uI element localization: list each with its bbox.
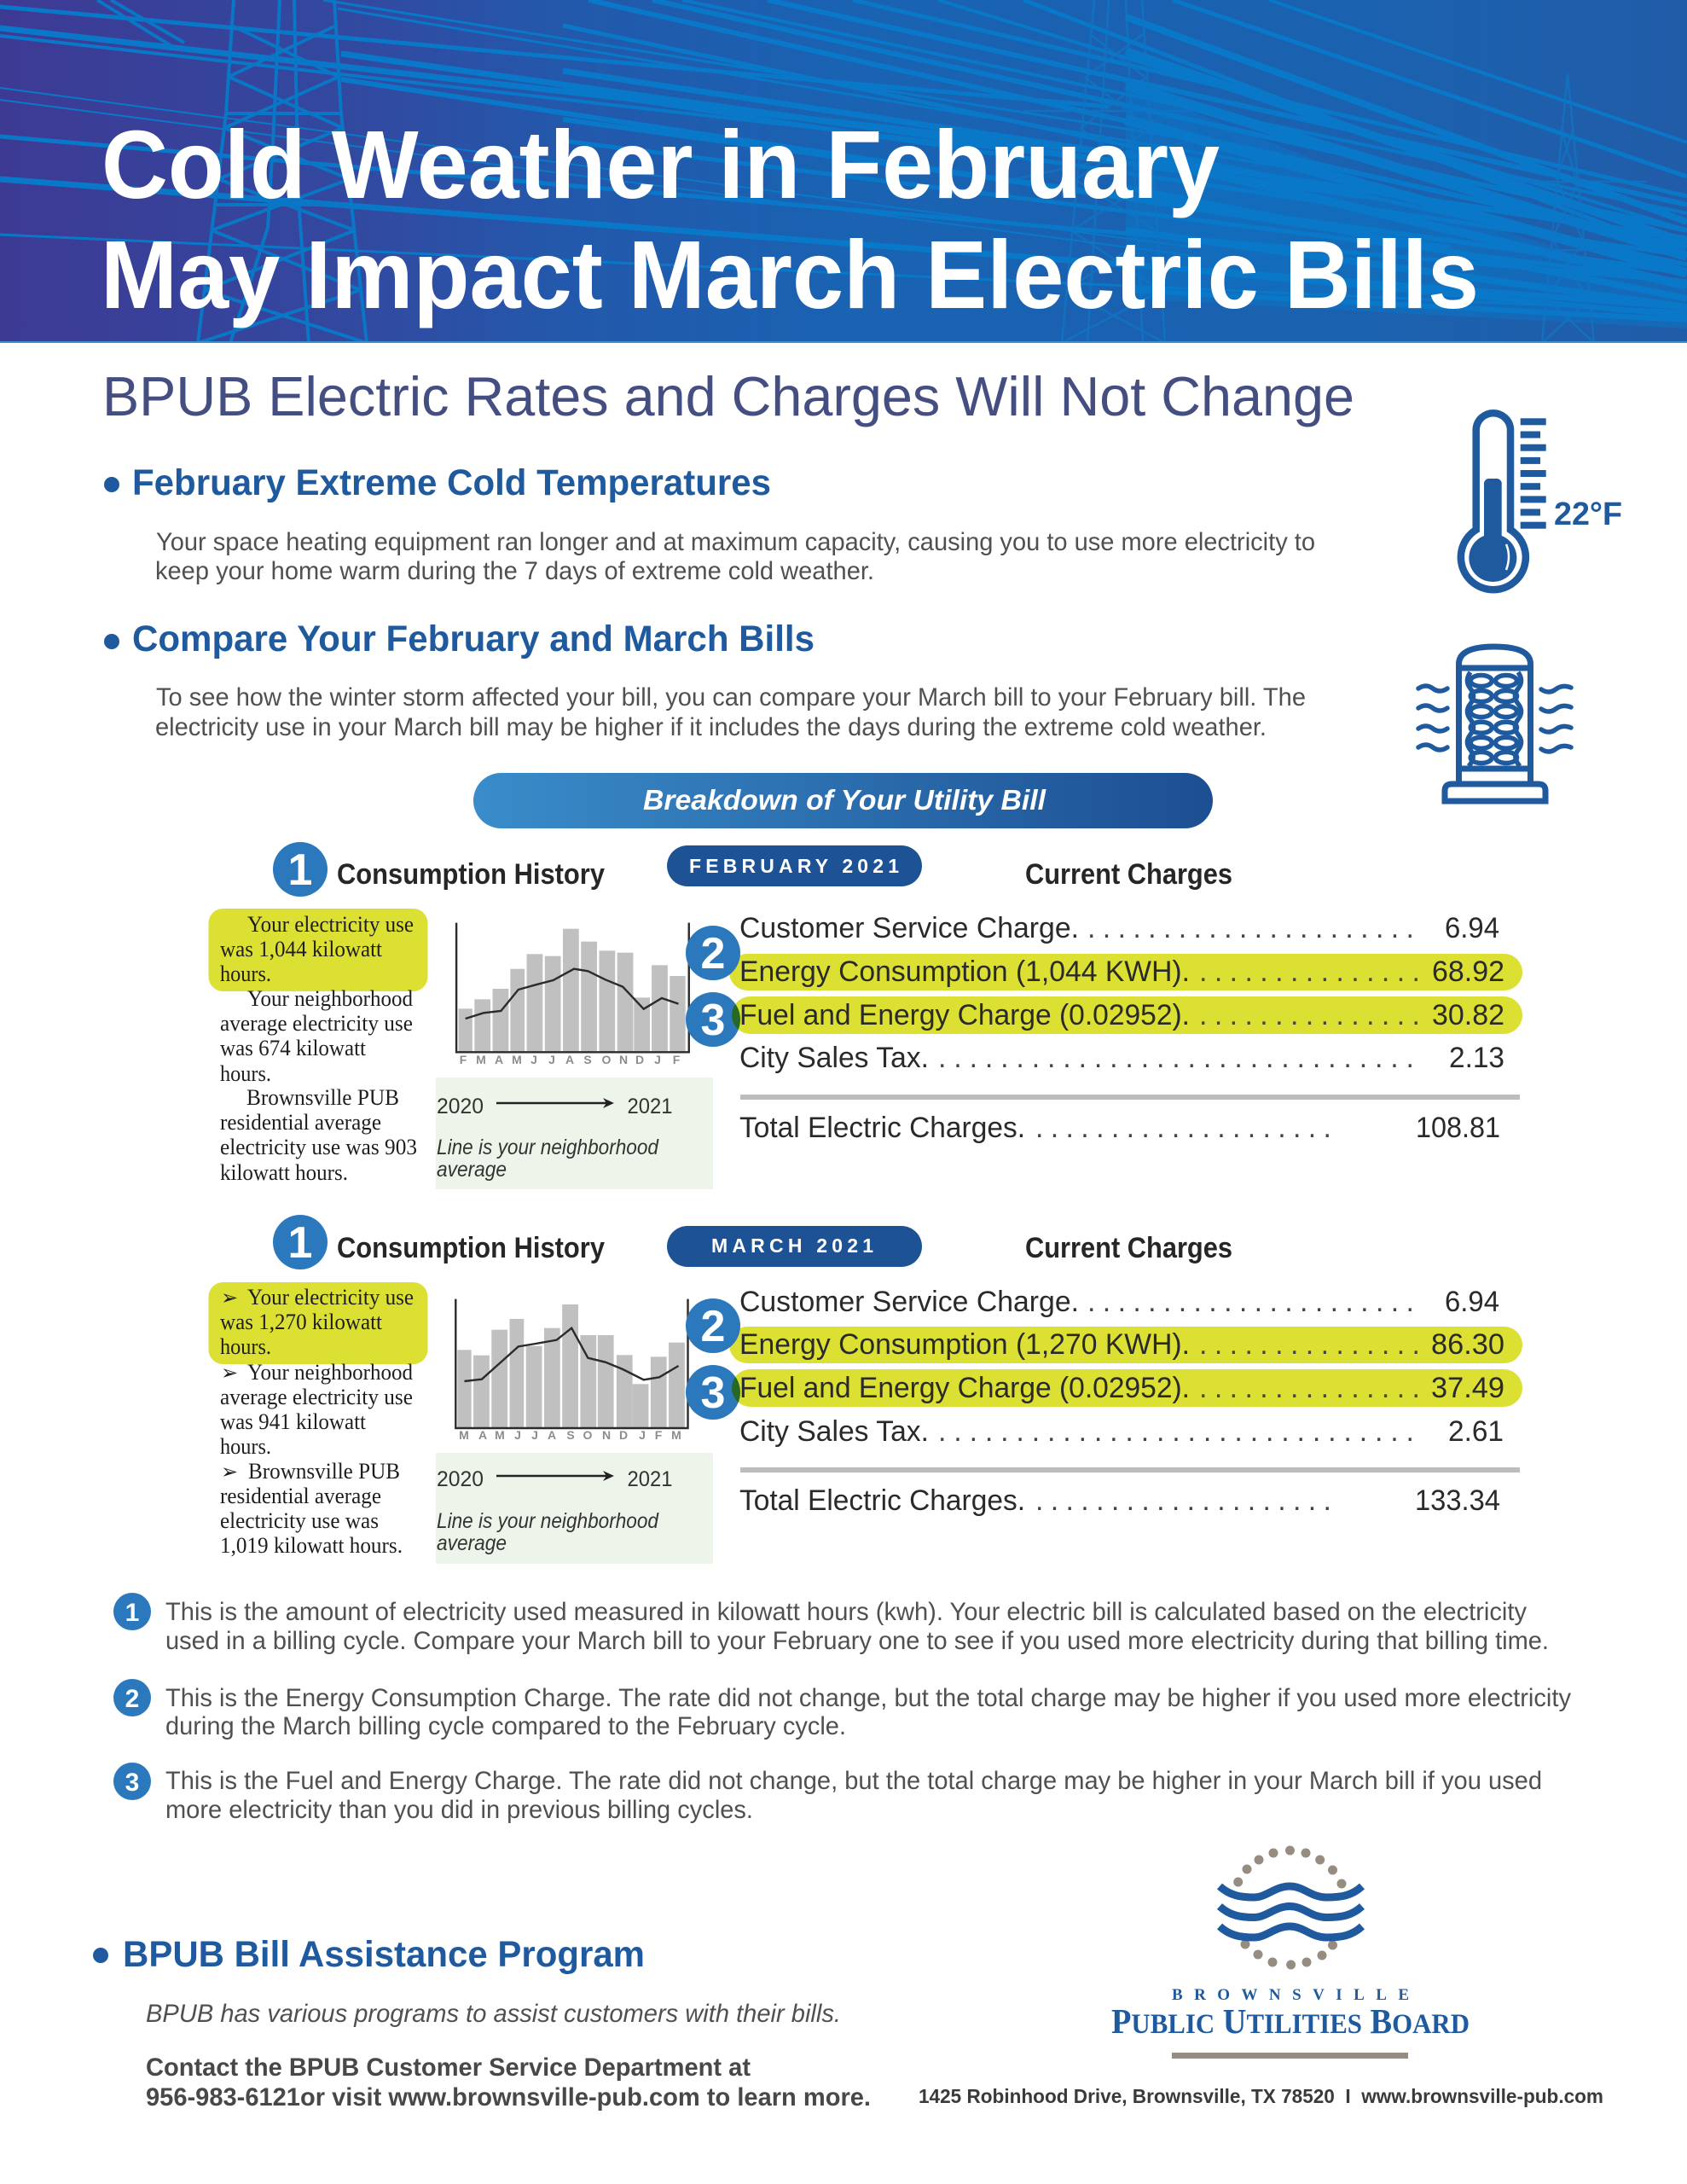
charge rows: 68.92 xyxy=(1432,956,1504,988)
bar chart with neighborhood line xyxy=(456,923,689,1066)
number badge 1: 1 xyxy=(288,1218,312,1268)
highlight pill: fuel charge xyxy=(732,1369,1522,1407)
heading: Compare Your February and March Bills xyxy=(132,619,815,659)
usage text: residential average xyxy=(220,1483,381,1508)
body text xyxy=(155,683,1306,741)
charge rows: 2.61 xyxy=(1448,1415,1504,1448)
bar chart with neighborhood line: M xyxy=(459,1428,469,1442)
charge rows: . . . . . . . . . . . . . . . xyxy=(1199,1328,1420,1361)
month pill: FEBRUARY 2021 xyxy=(689,855,899,877)
usage text: average electricity use xyxy=(220,1384,413,1409)
heading: Current Charges xyxy=(1025,1232,1232,1264)
body text: To see how the winter storm affected your bill, you can compare your March bill to your February bill. The xyxy=(156,683,1306,712)
temperature label: 22°F xyxy=(1554,497,1622,532)
intro text: BPUB has various programs to assist customers with their bills. xyxy=(146,2000,841,2028)
heading: Consumption History xyxy=(337,858,605,891)
usage text: ➢ xyxy=(221,1460,238,1484)
bar chart with neighborhood line: J xyxy=(548,1053,555,1066)
charge rows: Customer Service Charge. xyxy=(739,1286,1079,1318)
month pill xyxy=(667,1226,922,1267)
total row: . . . . . . . . . . . . . . . . . . . . xyxy=(1035,1484,1331,1517)
footnote 3: 3 xyxy=(125,1769,139,1797)
charge rows: . . . . . . . . . . . . . . . xyxy=(1199,956,1420,988)
usage text: Your neighborhood xyxy=(247,985,413,1011)
number badge 2: 2 xyxy=(701,1302,725,1351)
body text: keep your home warm during the 7 days of extreme cold weather. xyxy=(155,557,874,585)
panel: February consumption history xyxy=(208,842,713,1189)
number badge 2: 2 xyxy=(701,929,725,979)
highlight pill: energy consumption xyxy=(729,1327,1522,1363)
charge rows: 30.82 xyxy=(1432,999,1504,1031)
highlight pill: energy consumption xyxy=(729,954,1522,990)
usage text: was 1,044 kilowatt xyxy=(220,936,383,961)
charge rows: City Sales Tax. xyxy=(739,1415,929,1448)
footnote 3: This is the Fuel and Energy Charge. The rate did not change, but the total charge may be higher in your March bill if you used xyxy=(165,1767,1542,1795)
bar chart with neighborhood line: D xyxy=(635,1053,644,1066)
footnote 2 xyxy=(113,1679,1571,1740)
charge rows xyxy=(739,912,1504,1074)
usage text: Your neighborhood xyxy=(247,1359,413,1385)
number badge 1 xyxy=(273,1215,328,1269)
title: Cold Weather in February xyxy=(101,111,1220,218)
usage text: hours. xyxy=(220,1060,271,1086)
bar chart with neighborhood line: A xyxy=(565,1053,574,1066)
heading: February Extreme Cold Temperatures xyxy=(132,462,771,503)
bar chart with neighborhood line: O xyxy=(602,1053,612,1066)
usage text: ➢ xyxy=(221,1361,238,1385)
usage text: kilowatt hours. xyxy=(220,1159,348,1185)
chart legend xyxy=(436,1453,713,1564)
logo rule xyxy=(1172,2053,1408,2059)
usage text: ➢ xyxy=(221,1286,238,1310)
total row: Total Electric Charges. xyxy=(739,1484,1025,1517)
charge rows: Fuel and Energy Charge (0.02952). xyxy=(739,1372,1190,1404)
number badge 2 xyxy=(686,926,740,980)
total row: . . . . . . . . . . . . . . . . . . . . xyxy=(1035,1112,1331,1144)
bar chart with neighborhood line: O xyxy=(583,1428,593,1442)
footnote 1 xyxy=(113,1593,1549,1655)
number badge 3 xyxy=(686,1365,740,1420)
usage text xyxy=(220,1284,414,1558)
charge rows xyxy=(739,1286,1504,1448)
bar chart with neighborhood line: A xyxy=(478,1428,487,1442)
body text: electricity use in your March bill may be higher if it includes the days during the extreme cold weather. xyxy=(155,713,1267,741)
bar chart with neighborhood line: F xyxy=(460,1053,467,1066)
charge rows: Fuel and Energy Charge (0.02952). xyxy=(739,999,1190,1031)
bar chart with neighborhood line: F xyxy=(655,1428,663,1442)
usage text: residential average xyxy=(220,1109,381,1135)
charge rows: . . . . . . . . . . . . . . . . . . . . . . xyxy=(1087,912,1414,944)
title: May Impact March Electric Bills xyxy=(101,221,1479,328)
section: bill assistance program xyxy=(93,1934,871,2111)
charge rows: . . . . . . . . . . . . . . . . . . . . . . xyxy=(1087,1286,1414,1318)
usage text: hours. xyxy=(220,1333,271,1359)
subtitle: BPUB Electric Rates and Charges Will Not Change xyxy=(102,365,1354,427)
bullet xyxy=(104,477,119,492)
usage text: 1,019 kilowatt hours. xyxy=(220,1532,403,1558)
divider xyxy=(740,1467,1520,1472)
month pill: MARCH 2021 xyxy=(711,1234,873,1257)
footnote 3: more electricity than you did in previous billing cycles. xyxy=(165,1796,753,1824)
total row: 133.34 xyxy=(1415,1484,1500,1517)
charge rows: . . . . . . . . . . . . . . . xyxy=(1199,1372,1420,1404)
usage text: electricity use was xyxy=(220,1507,379,1533)
footnote 1: 1 xyxy=(125,1599,139,1627)
panel: February current charges xyxy=(667,845,1522,1144)
bar chart with neighborhood line: J xyxy=(531,1428,538,1442)
usage text: electricity use was 903 xyxy=(220,1134,417,1159)
bar chart with neighborhood line: J xyxy=(530,1053,537,1066)
chart legend: 2021 xyxy=(628,1095,672,1118)
bar chart with neighborhood line: S xyxy=(583,1053,592,1066)
charge rows: 37.49 xyxy=(1431,1372,1504,1404)
number badge 3: 3 xyxy=(701,996,725,1045)
bar chart with neighborhood line: M xyxy=(476,1053,486,1066)
usage text: hours. xyxy=(220,1433,271,1459)
chart legend: 2021 xyxy=(628,1467,672,1491)
contact text xyxy=(146,2053,871,2111)
bullet xyxy=(93,1948,108,1963)
total row xyxy=(739,1484,1500,1517)
chart legend xyxy=(436,1077,713,1189)
charge rows: Energy Consumption (1,270 KWH). xyxy=(739,1328,1190,1361)
usage text: was 1,270 kilowatt xyxy=(220,1309,383,1334)
contact text: Contact the BPUB Customer Service Department at xyxy=(146,2053,751,2082)
total row xyxy=(739,1112,1500,1144)
bar chart with neighborhood line xyxy=(455,1299,688,1442)
logo: Brownsville Public Utilities Board xyxy=(1111,1846,1470,2059)
charge rows: Energy Consumption (1,044 KWH). xyxy=(739,956,1190,988)
highlight pill: fuel charge xyxy=(732,996,1522,1034)
bar chart with neighborhood line: M xyxy=(512,1053,522,1066)
header banner xyxy=(0,0,1687,343)
charge rows: Customer Service Charge. xyxy=(739,912,1079,944)
usage text: average electricity use xyxy=(220,1010,413,1036)
chart legend: average xyxy=(437,1158,507,1182)
usage text xyxy=(220,911,417,1185)
charge rows: City Sales Tax. xyxy=(739,1042,929,1074)
footnote 2: during the March billing cycle compared to the February cycle. xyxy=(165,1712,846,1740)
usage text: Brownsville PUB xyxy=(246,1084,399,1110)
bar chart with neighborhood line: D xyxy=(619,1428,628,1442)
bullet xyxy=(104,634,119,649)
bar chart with neighborhood line: J xyxy=(639,1428,646,1442)
charge rows: 6.94 xyxy=(1445,912,1499,944)
charge rows: . . . . . . . . . . . . . . . xyxy=(1199,999,1420,1031)
body text xyxy=(155,528,1315,585)
bar chart with neighborhood line: M xyxy=(671,1428,681,1442)
bar chart with neighborhood line: F xyxy=(673,1053,681,1066)
bar chart with neighborhood line: J xyxy=(514,1428,521,1442)
panel: March consumption history xyxy=(208,1215,713,1564)
number badge 3 xyxy=(686,992,740,1047)
footnote 1: This is the amount of electricity used measured in kilowatt hours (kwh). Your electric bill is calculated based on the electricity xyxy=(165,1598,1527,1626)
bar chart with neighborhood line: A xyxy=(495,1053,503,1066)
banner: breakdown of your utility bill: Breakdown of Your Utility Bill xyxy=(643,784,1046,816)
chart legend: 2020 xyxy=(437,1467,484,1491)
chart legend: Line is your neighborhood xyxy=(437,1509,659,1533)
usage text: Your electricity use xyxy=(247,1284,414,1310)
banner: breakdown of your utility bill xyxy=(473,773,1213,828)
bar chart with neighborhood line: M xyxy=(495,1428,505,1442)
usage text: Brownsville PUB xyxy=(248,1458,400,1484)
highlight box xyxy=(208,909,428,991)
highlight box xyxy=(208,1282,428,1364)
charge rows: . . . . . . . . . . . . . . . . . . . . . . . . . . . . . . . xyxy=(938,1042,1414,1074)
address line: 1425 Robinhood Drive, Brownsville, TX 78520 I www.brownsville-pub.com xyxy=(919,2085,1603,2107)
icon: thermometer xyxy=(1461,413,1622,590)
bar chart with neighborhood line: S xyxy=(566,1428,575,1442)
heading: Consumption History xyxy=(337,1232,605,1264)
charge rows: . . . . . . . . . . . . . . . . . . . . . . . . . . . . . . . xyxy=(938,1415,1414,1448)
number badge 3: 3 xyxy=(701,1368,725,1418)
chart legend: 2020 xyxy=(437,1095,484,1118)
footnote 2: This is the Energy Consumption Charge. The rate did not change, but the total charge may be higher if you used more electricity xyxy=(165,1684,1571,1712)
contact text: 956-983-6121or visit www.brownsville-pub.com to learn more. xyxy=(146,2083,871,2111)
footnote 2: 2 xyxy=(125,1685,139,1713)
logo wordmark: BROWNSVILLE xyxy=(1172,1986,1409,2004)
section: compare bills xyxy=(104,619,1306,741)
panel: March current charges xyxy=(667,1226,1522,1517)
bar chart with neighborhood line: N xyxy=(602,1428,611,1442)
body text: Your space heating equipment ran longer and at maximum capacity, causing you to use more electricity to xyxy=(156,528,1315,556)
bar chart with neighborhood line: A xyxy=(548,1428,556,1442)
number badge 1 xyxy=(273,842,328,897)
section: February extreme cold xyxy=(104,462,1315,585)
chart legend: Line is your neighborhood xyxy=(437,1136,659,1159)
bar chart with neighborhood line: N xyxy=(619,1053,628,1066)
total row: Total Electric Charges. xyxy=(739,1112,1025,1144)
heading: BPUB Bill Assistance Program xyxy=(123,1934,645,1975)
power lines and towers background xyxy=(0,0,1687,343)
number badge 1: 1 xyxy=(288,845,312,895)
bar chart with neighborhood line: J xyxy=(654,1053,661,1066)
usage text: was 674 kilowatt xyxy=(220,1035,367,1060)
usage text: was 941 kilowatt xyxy=(220,1409,367,1434)
month pill xyxy=(667,845,922,886)
usage text: hours. xyxy=(220,961,271,986)
chart legend: average xyxy=(437,1531,507,1555)
footnote 3 xyxy=(113,1763,1542,1824)
logo waves xyxy=(1220,1886,1362,1937)
icon: space heater xyxy=(1418,647,1571,801)
charge rows: 2.13 xyxy=(1449,1042,1504,1074)
divider xyxy=(740,1095,1520,1100)
charge rows: 86.30 xyxy=(1431,1328,1504,1361)
usage text: Your electricity use xyxy=(247,911,414,937)
logo dots xyxy=(1233,1846,1346,1969)
title xyxy=(101,111,1479,328)
logo wordmark: PUBLIC UTILITIES BOARD xyxy=(1111,2001,1470,2041)
number badge 2 xyxy=(686,1298,740,1353)
charge rows: 6.94 xyxy=(1445,1286,1499,1318)
heading: Current Charges xyxy=(1025,858,1232,891)
total row: 108.81 xyxy=(1416,1112,1500,1144)
footnote 1: used in a billing cycle. Compare your March bill to your February one to see if you used more electricity during that billing time. xyxy=(165,1627,1549,1655)
